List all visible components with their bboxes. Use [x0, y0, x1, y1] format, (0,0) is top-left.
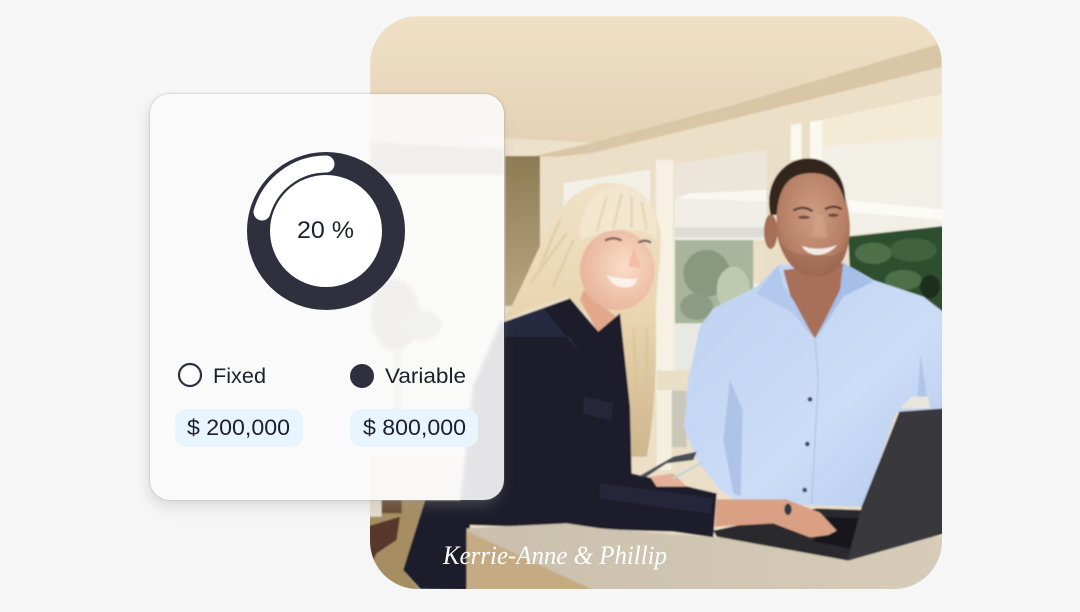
- panel: loan split card: [150, 94, 504, 500]
- legend: variable: [350, 364, 466, 388]
- amount: variable: [350, 409, 478, 447]
- legend: variable: Variable: [385, 365, 466, 388]
- room: ceiling and walls: [370, 16, 942, 589]
- person: Phillip: [684, 158, 945, 507]
- counter and foreground: [367, 500, 947, 590]
- legend: fixed: [179, 364, 266, 388]
- windows and garden view: [540, 93, 947, 470]
- photo: couple at laptop: [370, 16, 942, 589]
- amount: fixed: [175, 409, 303, 447]
- signature: Kerrie-Anne & Phillip: [442, 541, 667, 570]
- donut chart: [258, 164, 394, 298]
- legend: fixed: Fixed: [213, 365, 266, 388]
- amount: fixed: $ 200,000: [187, 415, 290, 440]
- wall and plant seen through card: [372, 280, 500, 502]
- donut chart: 20 %: [297, 217, 354, 244]
- amount: variable: $ 800,000: [363, 415, 466, 440]
- laptop: [713, 397, 945, 561]
- person: Kerrie-Anne: [403, 183, 717, 590]
